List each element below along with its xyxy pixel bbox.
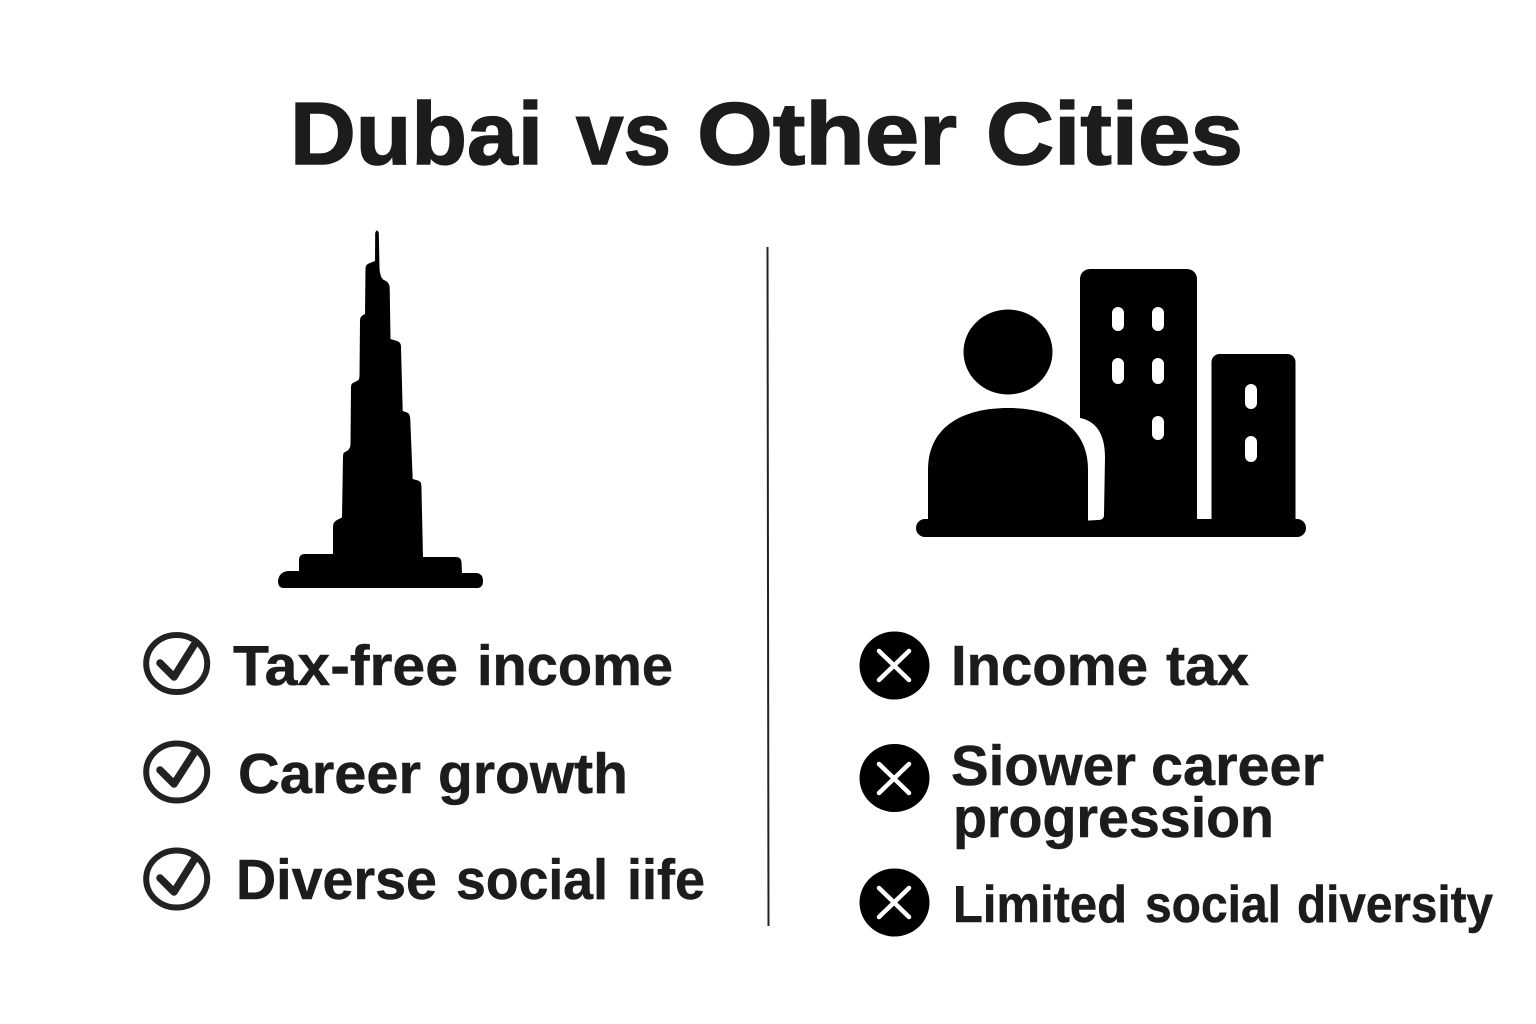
- label: Tax-free: [233, 634, 458, 698]
- icon: cross: [860, 744, 930, 812]
- title: vs: [576, 84, 671, 183]
- title: Dubai: [290, 84, 543, 183]
- label: income: [477, 634, 673, 698]
- label: [953, 876, 1493, 934]
- benefit: diverse social life: [146, 848, 705, 912]
- label: career: [1151, 734, 1324, 798]
- panel: Dubai: [146, 230, 705, 912]
- icon: person and buildings: [916, 269, 1306, 537]
- icon: check: [146, 635, 207, 692]
- benefit: tax-free income: [146, 634, 673, 698]
- drawback: limited social diversity: [860, 868, 1493, 936]
- icon: check: [146, 850, 207, 908]
- panel: other cities: [860, 269, 1493, 936]
- drawback: slower career progression: [860, 734, 1324, 850]
- title: Cities: [986, 84, 1243, 183]
- label: Siower: [951, 734, 1136, 798]
- title: Other: [697, 84, 957, 183]
- icon: Burj Khalifa tower: [278, 230, 483, 588]
- label: [233, 634, 673, 698]
- icon: check: [146, 744, 207, 800]
- label: Limited: [953, 876, 1127, 934]
- icon: cross: [860, 868, 930, 936]
- icon: cross: [860, 632, 930, 700]
- label: Career: [238, 742, 421, 806]
- label: progression: [953, 786, 1274, 850]
- label: [951, 734, 1324, 850]
- label: Income: [951, 634, 1148, 698]
- label: growth: [438, 742, 628, 806]
- label: [951, 634, 1249, 698]
- label: Diverse: [236, 848, 437, 912]
- label: diversity: [1297, 876, 1493, 934]
- title: [290, 84, 1243, 183]
- drawback: income tax: [860, 632, 1249, 700]
- label: [238, 742, 628, 806]
- label: [236, 848, 705, 912]
- benefit: career growth: [146, 742, 628, 806]
- label: iife: [627, 848, 705, 912]
- label: social: [456, 848, 608, 912]
- label: social: [1145, 876, 1281, 934]
- label: tax: [1166, 634, 1249, 698]
